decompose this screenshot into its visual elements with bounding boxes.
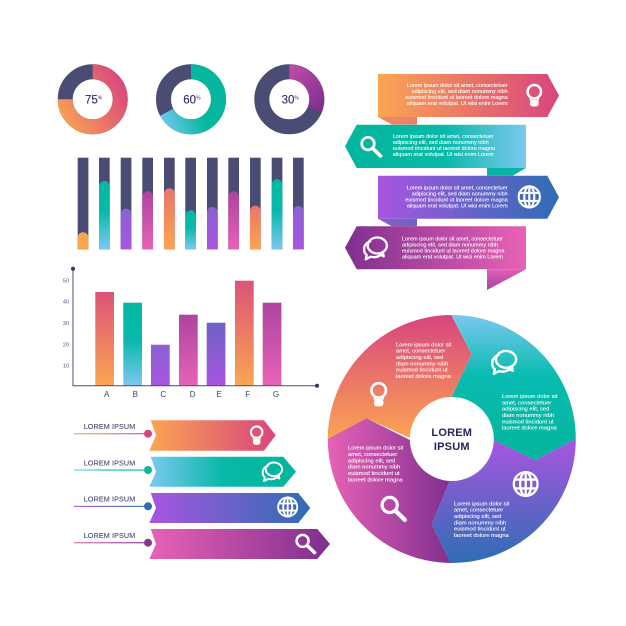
ribbon 1: bulb: Lorem ipsum dolor sit amet, consectetuer	[407, 83, 508, 89]
ribbon 3: globe: aliquam erat volutpat. Ut wisi enim Lorem	[407, 203, 508, 209]
bar chart A to G: A	[104, 390, 110, 399]
segment: purple with globe: amet, consectetuer	[454, 508, 503, 514]
segment: teal with chat: laoreet dolore magna	[502, 426, 558, 432]
bar chart A to G: 20	[63, 342, 69, 348]
segment: pink with magnifier: euismod tincidunt ut	[348, 471, 400, 477]
bar chart A to G: 40	[63, 300, 69, 306]
ribbon 3: globe: Lorem ipsum dolor sit amet, consectetuer	[407, 185, 508, 191]
segment: pink with magnifier: laoreet dolore magna	[348, 477, 404, 483]
ribbon 4: chat: aliquam erat volutpat. Ut wisi enim Lorem	[402, 254, 503, 260]
segment: purple with globe: euismod tincidunt ut	[454, 527, 506, 533]
ribbon 1: bulb: euismod tincidunt ut laoreet dolore magna	[405, 95, 509, 101]
arrow row 4: magnifier	[74, 529, 330, 559]
ribbon 1: bulb: aliquam erat volutpat. Ut wisi enim Lorem	[407, 101, 508, 107]
donut chart: 30%	[262, 72, 317, 127]
ribbon 4: chat: euismod tincidunt ut laoreet dolore magna	[402, 248, 505, 254]
ribbon 2: magnifier: aliquam erat volutpat. Ut wisi enim Lorem	[393, 152, 494, 158]
segment: pink with magnifier: adipiscing elit, sed	[348, 458, 395, 464]
arrow row 4: magnifier: LOREM IPSUM	[84, 531, 135, 540]
center label	[410, 397, 494, 481]
center label: IPSUM	[434, 441, 470, 453]
ribbon 3: globe: adipiscing elit, sed diam nonummy nibh	[412, 191, 508, 197]
bar chart A to G: F	[245, 390, 250, 399]
segment: teal with chat: Lorem ipsum dolor sit	[502, 394, 558, 400]
segment: teal with chat: amet, consectetuer	[502, 400, 551, 406]
donut chart: 75%: %	[98, 96, 103, 102]
segment: purple with globe: laoreet dolore magna	[454, 533, 510, 539]
bar chart A to G: 30	[63, 321, 69, 327]
segment: pink with magnifier: Lorem ipsum dolor sit	[348, 446, 404, 452]
arrow row 2: chat	[74, 457, 296, 487]
donut chart: 75%	[65, 72, 120, 127]
bar chart A to G	[63, 267, 319, 399]
bar chart A to G: E	[216, 390, 222, 399]
donut chart: 60%: 60	[183, 94, 196, 106]
donut chart: 30%: %	[294, 96, 299, 102]
ribbon 4: chat	[345, 226, 526, 290]
ribbon 2: magnifier: adipiscing elit, sed diam nonummy nibh	[393, 140, 489, 146]
bar chart A to G: D	[190, 390, 196, 399]
center label: LOREM	[431, 427, 472, 439]
segment: orange with bulb: diam nonummy nibh	[396, 361, 448, 367]
segment: orange with bulb: Lorem ipsum dolor sit	[396, 342, 452, 348]
segment: purple with globe: Lorem ipsum dolor sit	[454, 501, 510, 507]
ribbon 1: bulb	[378, 74, 559, 124]
donut chart: 60%	[164, 72, 218, 127]
ribbon 2: magnifier	[345, 125, 526, 176]
ribbon 3: globe	[378, 176, 559, 226]
arrow row 1: bulb: LOREM IPSUM	[84, 422, 135, 431]
segment: teal with chat: adipiscing elit, sed	[502, 407, 549, 413]
donut chart: 75%: 75	[85, 94, 98, 106]
segment: purple with globe: diam nonummy nibh	[454, 520, 506, 526]
bar chart A to G: B	[133, 390, 138, 399]
vertical progress bars	[78, 158, 304, 249]
bar chart A to G: 10	[63, 363, 69, 369]
ribbon 4: chat: adipiscing elit, sed diam nonummy nibh	[402, 242, 498, 248]
segment: orange with bulb: amet, consectetuer	[396, 349, 445, 355]
bar chart A to G: C	[160, 390, 166, 399]
segment: teal with chat	[451, 315, 576, 460]
segment: orange with bulb	[328, 315, 472, 440]
arrow row 3: globe	[74, 493, 310, 523]
arrow row 1: bulb	[74, 420, 276, 451]
bar chart A to G: 50	[63, 278, 69, 284]
ribbon 2: magnifier: Lorem ipsum dolor sit amet, consectetuer	[393, 134, 494, 140]
ribbon 3: globe: euismod tincidunt ut laoreet dolore magna	[405, 197, 509, 203]
ribbon 4: chat: Lorem ipsum dolor sit amet, consectetuer	[402, 236, 503, 242]
donut chart: 60%: %	[196, 96, 201, 102]
ribbon 2: magnifier: euismod tincidunt ut laoreet dolore magna	[393, 146, 496, 152]
segment: teal with chat: diam nonummy nibh	[502, 413, 554, 419]
segment: pink with magnifier: diam nonummy nibh	[348, 465, 400, 471]
segment: orange with bulb: laoreet dolore magna	[396, 374, 452, 380]
segment: pink with magnifier	[328, 418, 452, 563]
pie chart	[328, 315, 576, 563]
segment: orange with bulb: adipiscing elit, sed	[396, 355, 443, 361]
donut chart: 30%: 30	[282, 94, 294, 106]
arrow row 3: globe: LOREM IPSUM	[84, 495, 135, 504]
ribbon 1: bulb: adipiscing elit, sed diam nonummy nibh	[412, 89, 508, 95]
bar chart A to G: G	[273, 390, 279, 399]
segment: pink with magnifier: amet, consectetuer	[348, 452, 397, 458]
segment: orange with bulb: euismod tincidunt ut	[396, 368, 448, 374]
arrow row 2: chat: LOREM IPSUM	[84, 459, 135, 468]
segment: teal with chat: euismod tincidunt ut	[502, 419, 554, 425]
segment: purple with globe	[432, 439, 576, 563]
segment: purple with globe: adipiscing elit, sed	[454, 514, 501, 520]
